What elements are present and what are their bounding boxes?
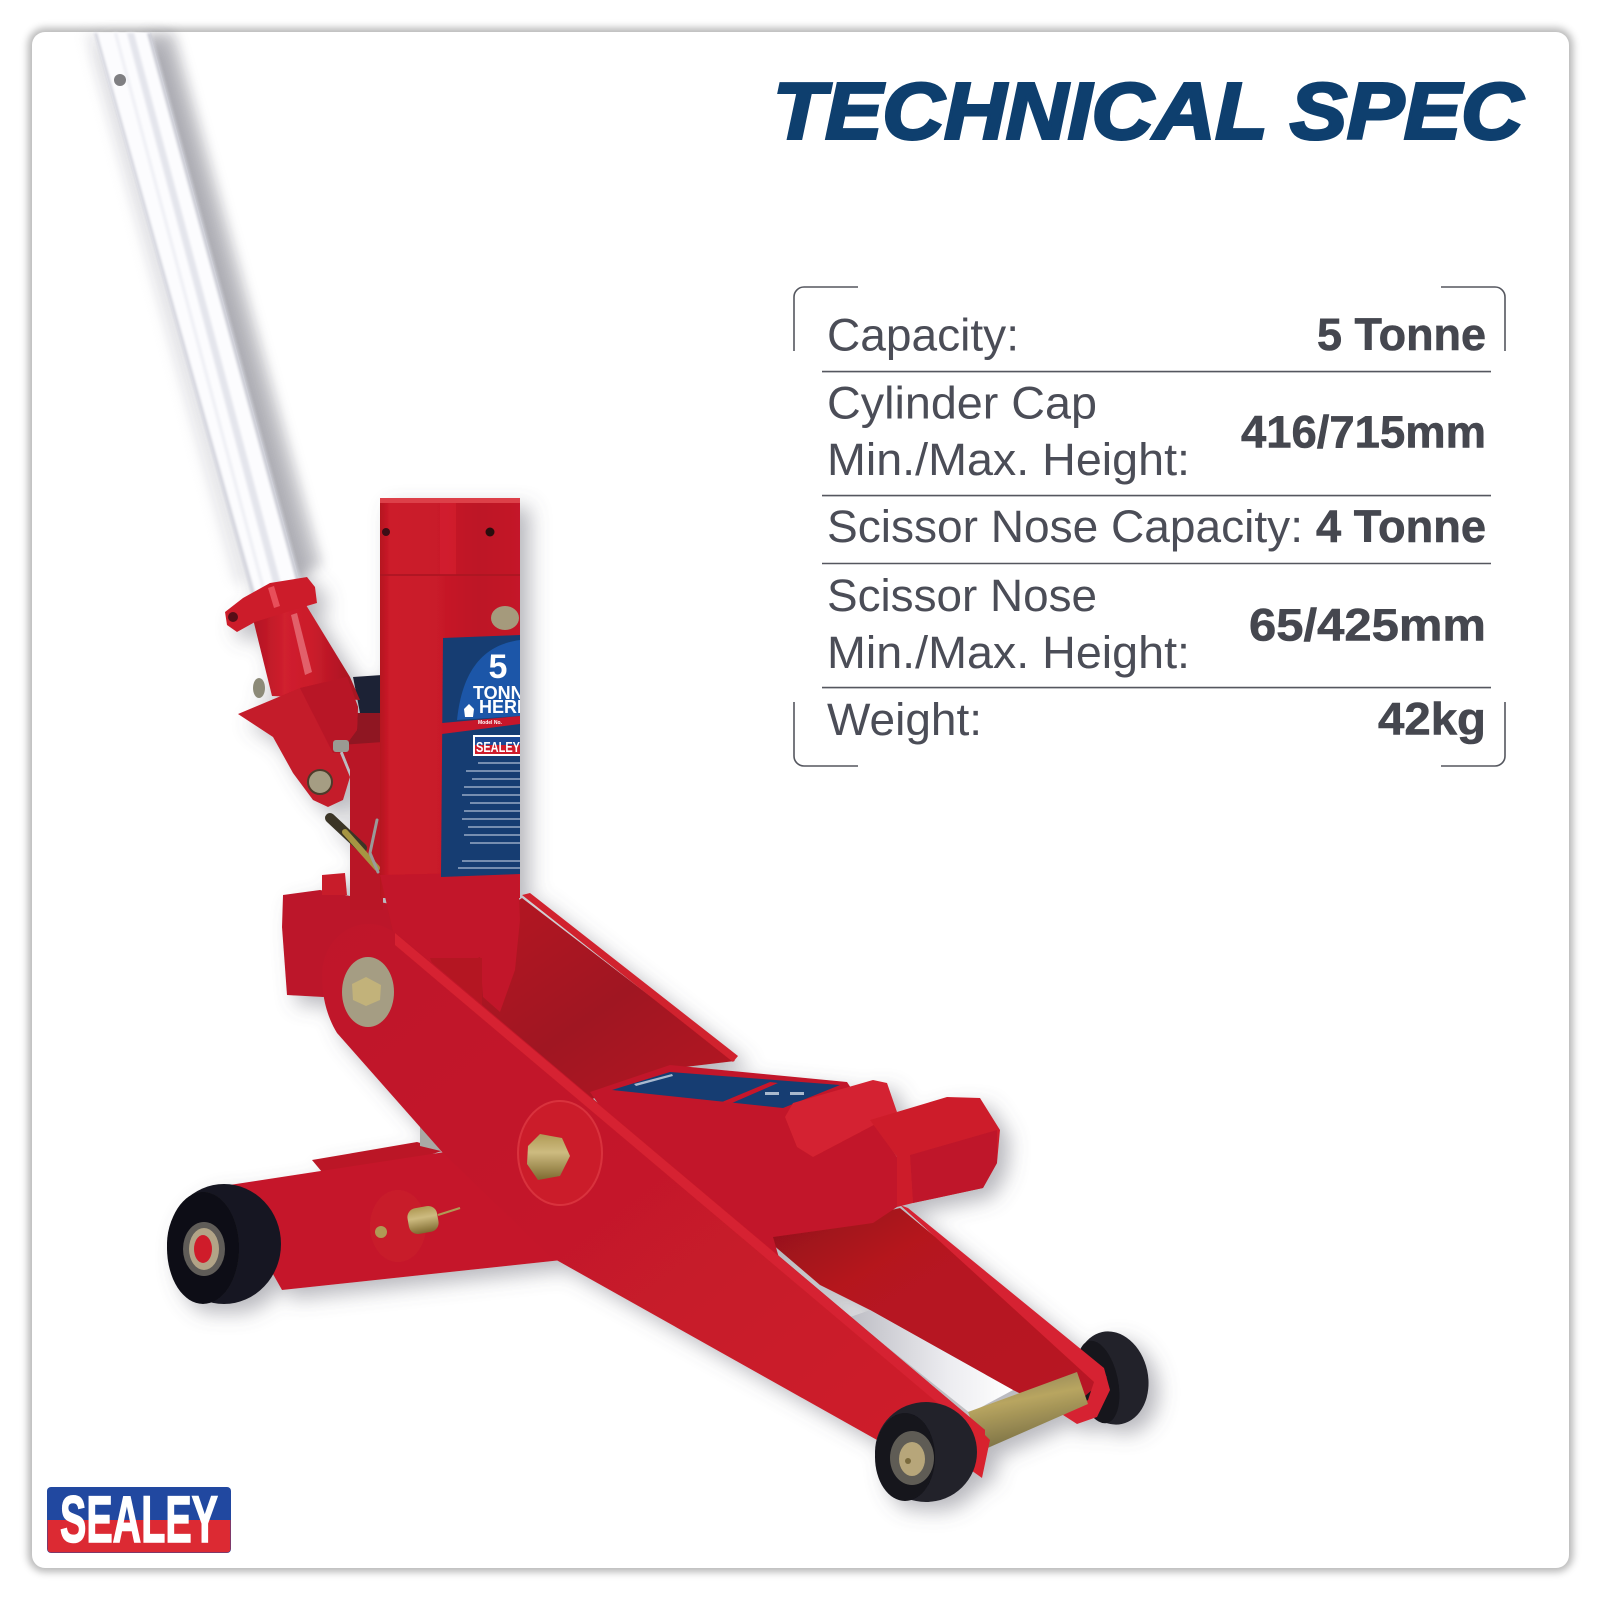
row: cylinder cap height: 416/715mm xyxy=(1241,406,1486,458)
row: capacity: Capacity: xyxy=(827,310,1019,360)
front wheel xyxy=(167,1184,281,1304)
row: weight xyxy=(827,694,1486,745)
pump bracket xyxy=(353,675,382,713)
main arm upper edge highlight xyxy=(395,933,985,1443)
base block xyxy=(282,873,395,997)
row: cylinder cap height xyxy=(827,378,1486,485)
gap behind arms xyxy=(850,1310,1013,1413)
main lift arm xyxy=(322,924,985,1442)
handle shadow xyxy=(84,33,322,584)
saddle label xyxy=(612,1072,840,1108)
warning label on cylinder xyxy=(441,635,520,877)
row: capacity: 5 Tonne xyxy=(1317,309,1486,360)
warning label on cylinder: SEALEY xyxy=(476,739,520,756)
row: capacity xyxy=(827,309,1486,360)
axle xyxy=(968,1372,1088,1450)
upper pivot bolt xyxy=(342,957,394,1027)
row: scissor nose height: Min./Max. Height: xyxy=(827,627,1190,678)
saddle roller xyxy=(870,1097,1000,1207)
pump body xyxy=(340,713,383,910)
pump socket xyxy=(225,577,360,700)
table corner brackets xyxy=(794,287,1505,766)
warning label on cylinder: TONNE xyxy=(473,683,536,703)
row: weight: Weight: xyxy=(827,694,982,745)
warning label on cylinder: 5 xyxy=(489,648,507,686)
row: scissor nose height: 65/425mm xyxy=(1249,600,1486,650)
release latch xyxy=(330,818,378,872)
row: cylinder cap height: Min./Max. Height: xyxy=(827,434,1190,485)
saddle arm xyxy=(590,1065,897,1268)
row: scissor nose height: Scissor Nose xyxy=(827,570,1097,621)
rear wheel xyxy=(1067,1325,1157,1431)
spec table xyxy=(794,287,1505,766)
jack handle xyxy=(94,33,303,600)
centre pivot xyxy=(518,1101,602,1205)
saddle lug xyxy=(785,1080,897,1157)
pump pedal xyxy=(238,677,358,807)
title: TECHNICAL SPEC xyxy=(773,66,1524,156)
warning label on cylinder: Model No. xyxy=(478,720,502,726)
warning label on cylinder: HERE xyxy=(479,697,529,717)
row: weight: 42kg xyxy=(1378,694,1486,744)
rear lower arm xyxy=(765,1208,1107,1415)
front roller wheel xyxy=(875,1402,990,1502)
inner lift arm xyxy=(440,898,735,1100)
back strut xyxy=(312,1125,445,1172)
logo: SEALEY: SEALEY xyxy=(60,1482,218,1556)
row: scissor nose capacity: Scissor Nose Capacity: xyxy=(827,501,1303,552)
table row dividers xyxy=(822,372,1491,688)
adjuster bolt xyxy=(370,1190,460,1262)
hydraulic cylinder xyxy=(380,498,520,898)
front arm and wheel carrier xyxy=(223,1152,562,1290)
inner arm edge xyxy=(522,893,738,1062)
product photo: trolley jack xyxy=(94,33,1157,1502)
row: cylinder cap height: Cylinder Cap xyxy=(827,378,1097,428)
row: scissor nose height xyxy=(827,570,1486,678)
cylinder base xyxy=(380,872,520,1012)
row: scissor nose capacity: 4 Tonne xyxy=(1316,501,1486,552)
logo: SEALEY xyxy=(47,1482,231,1556)
rear arm edge and end plate xyxy=(900,1205,1110,1424)
